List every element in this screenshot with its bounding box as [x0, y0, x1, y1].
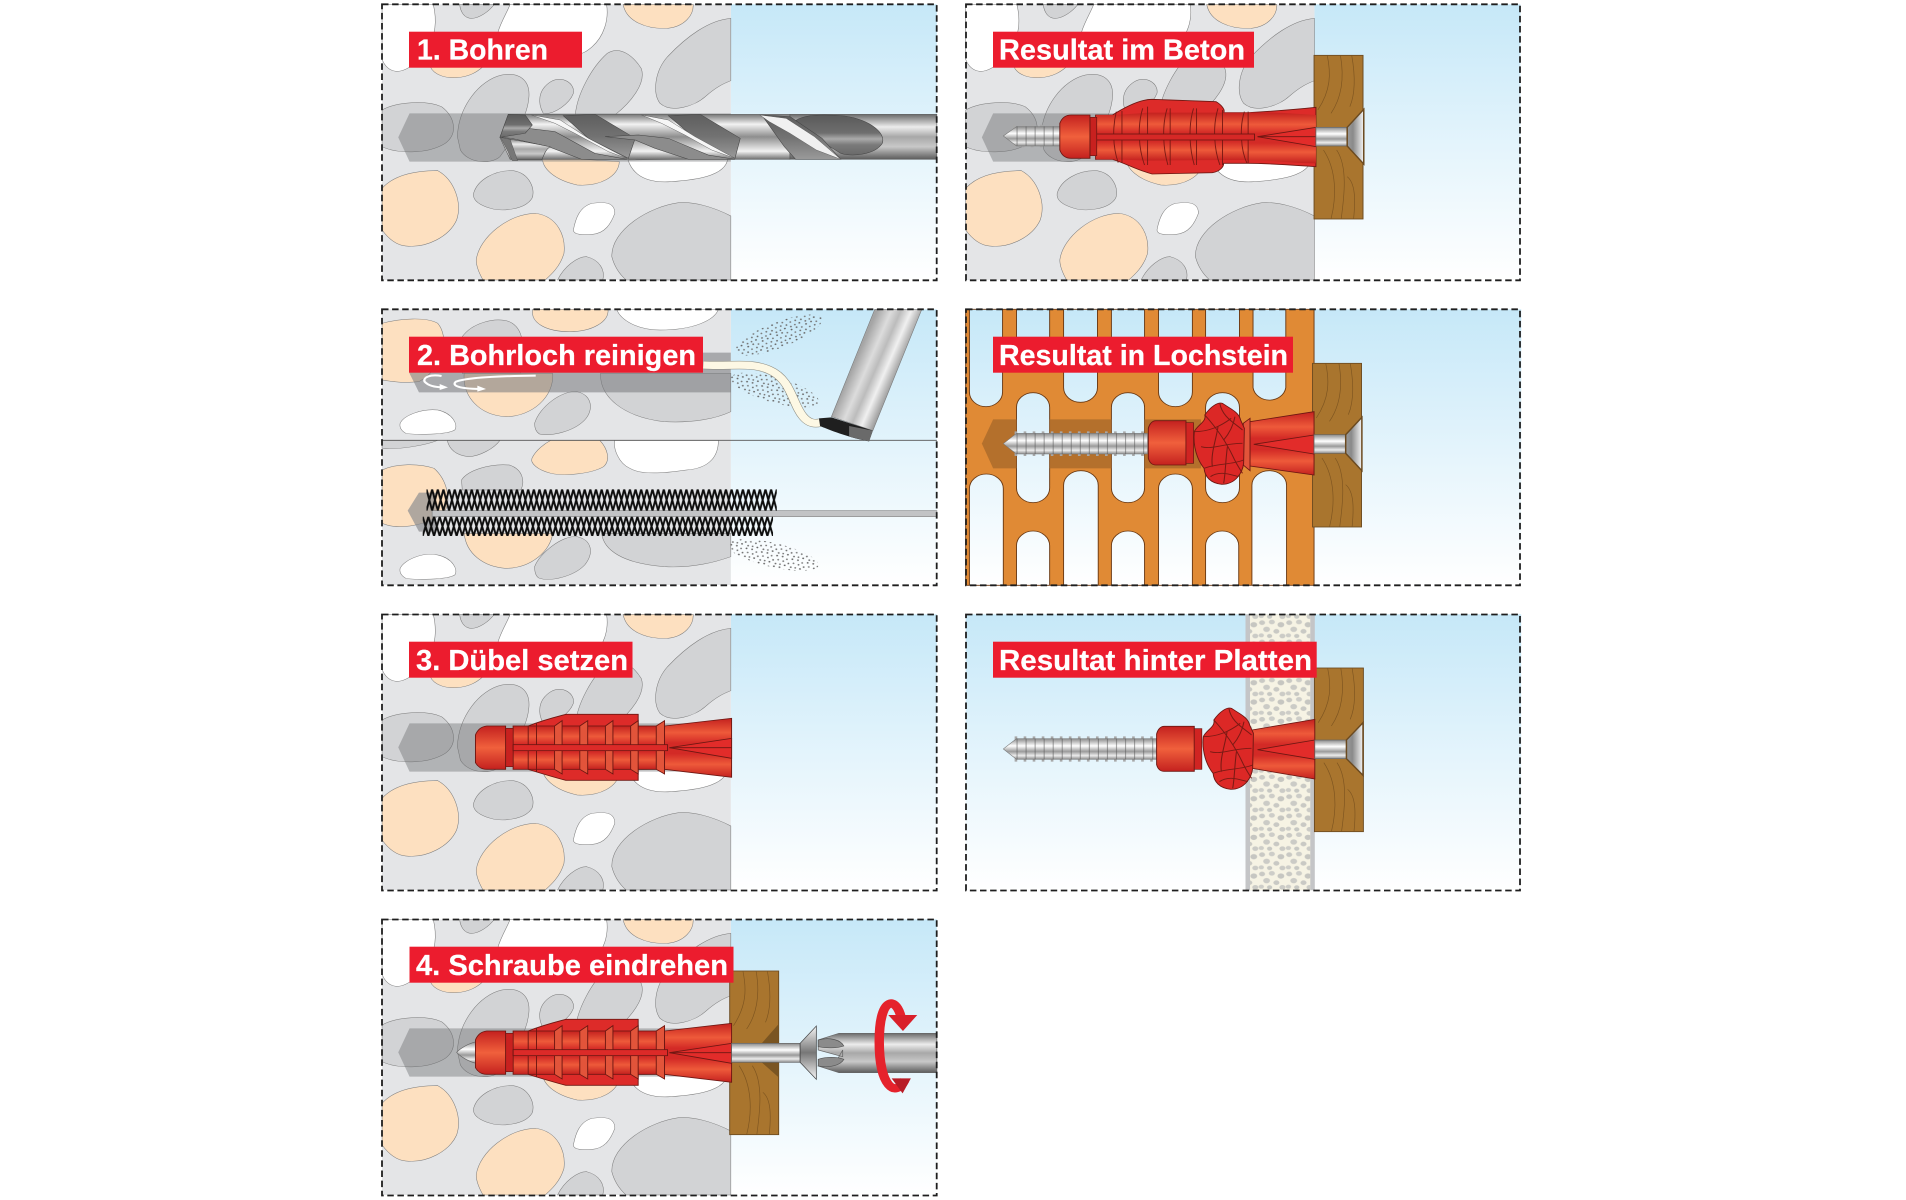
- icon: swirl arrows: [424, 375, 536, 392]
- wood plate: [1314, 668, 1363, 832]
- perforated brick: [966, 309, 1314, 585]
- drill hole in brick: [982, 419, 1201, 468]
- icon: expanded wall plug: [1060, 99, 1316, 174]
- panel: Resultat im Beton: [966, 4, 1520, 280]
- icon: screwdriver bit: [818, 1033, 937, 1073]
- divider line: [382, 439, 937, 442]
- drill hole, lower: [408, 493, 436, 532]
- concrete wall with drill hole: [382, 919, 937, 1195]
- dust clouds: [724, 306, 827, 577]
- panel border: [966, 4, 1520, 280]
- sky background: [966, 614, 1521, 890]
- icon: wall plug: [475, 714, 732, 780]
- panel: Resultat in Lochstein: [966, 309, 1521, 585]
- label: 3. Dübel setzen: 3. Dübel setzen: [416, 645, 628, 677]
- panel: 1. Bohren: [382, 4, 937, 280]
- panel border: [966, 614, 1520, 890]
- sky background: [966, 309, 1521, 585]
- label: 1. Bohren: [409, 32, 582, 68]
- wood plate: [1313, 363, 1362, 527]
- icon: wall plug: [475, 1019, 732, 1085]
- screw thread: [1003, 433, 1148, 454]
- plasterboard wall: [1246, 614, 1315, 890]
- icon: drill bit: [500, 114, 937, 161]
- dark hole shading in wood: [762, 1024, 779, 1077]
- panel border: [966, 309, 1520, 585]
- screw thread: [1003, 739, 1157, 759]
- drill hole, upper: [410, 353, 731, 392]
- screw shaft and head: [732, 1026, 816, 1079]
- icon: rotation arrow: [879, 1003, 917, 1093]
- label: 2. Bohrloch reinigen: 2. Bohrloch reinigen: [417, 340, 696, 372]
- concrete wall with drill hole: [382, 4, 937, 280]
- icon: knotted wall plug: [1157, 708, 1315, 789]
- screw shaft and countersunk head: [1316, 109, 1364, 164]
- panel border: [382, 4, 937, 280]
- sky background: [731, 309, 937, 585]
- label: 1. Bohren: 1. Bohren: [417, 34, 548, 66]
- concrete wall with drill hole: [966, 4, 1520, 280]
- icon: air blower with hose: [703, 309, 922, 441]
- panel: 2. Bohrloch reinigen: [382, 306, 937, 585]
- concrete wall with drill hole: [382, 614, 937, 890]
- screw shaft and countersunk head: [1314, 417, 1362, 471]
- screw tip: [457, 1042, 476, 1063]
- label: 4. Schraube eindrehen: 4. Schraube eindrehen: [416, 950, 728, 982]
- icon: knotted wall plug: [1148, 403, 1314, 484]
- panel border: [382, 614, 937, 890]
- panel border: [382, 309, 937, 585]
- panel: 3. Dübel setzen: [382, 614, 937, 890]
- icon: cleaning brush: [423, 489, 937, 536]
- label: Resultat in Lochstein: Resultat in Lochstein: [999, 340, 1288, 372]
- panel: 4. Schraube eindrehen: [382, 919, 937, 1196]
- panel: Resultat hinter Platten: [966, 614, 1521, 890]
- label: Resultat hinter Platten: Resultat hinter Platten: [999, 645, 1312, 677]
- panel border: [382, 920, 937, 1196]
- concrete wall with stones: [382, 309, 731, 585]
- screw shaft and countersunk head: [1315, 723, 1363, 775]
- screw thread: [1003, 127, 1060, 146]
- wood plate: [730, 971, 779, 1135]
- label: Resultat im Beton: Resultat im Beton: [999, 34, 1245, 66]
- wood plate: [1314, 55, 1363, 219]
